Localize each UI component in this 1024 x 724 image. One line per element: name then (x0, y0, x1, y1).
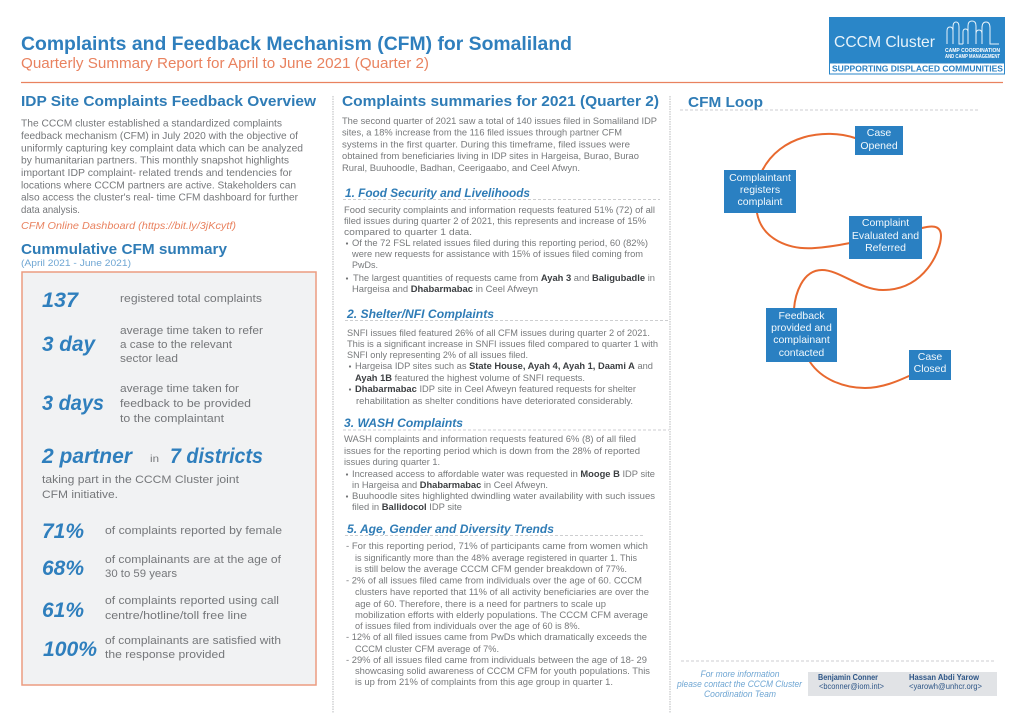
heading: cumulative summary: Cummulative CFM summary (21, 241, 228, 258)
stat: 3 days: to the complaintant (120, 413, 225, 425)
stat: 3 day: sector lead (120, 353, 178, 365)
text block: intro: Rural, Buuhoodle, Badhan, Ceerigaabo, and Ceel Afwyn. (342, 163, 580, 174)
logo: CCCM Cluster: CCCM Cluster (834, 34, 936, 51)
section: shelter: This is a significant increase in SNFI issues filed compared to quarter 1 with (347, 339, 658, 350)
section: shelter: Dhabarmabac IDP site in Ceel Afweyn featured requests for shelter (355, 384, 636, 395)
section: age, gender and diversity: - 29% of all issues filed came from individuals between the age of 18- 29 (346, 655, 647, 666)
stat: partners and districts: in (150, 453, 159, 465)
section: food security: Food security complaints and information requests featured 51% (72) of all (344, 205, 655, 216)
heading: age, gender and diversity: 5. Age, Gender and Diversity Trends (347, 522, 554, 536)
panel: CFM loop (680, 94, 980, 388)
panel: overview (21, 93, 316, 232)
section: age, gender and diversity (345, 522, 650, 688)
text block: overview: uniformly capturing key complaint data which can be analyzed (21, 142, 303, 154)
stat: 137: registered total complaints (120, 293, 262, 305)
panel: cumulative stats (22, 272, 316, 685)
stat: 100% (43, 635, 281, 661)
stat: partners and districts (41, 445, 263, 501)
contacts box: Benjamin Conner (818, 673, 878, 682)
section: age, gender and diversity: is still below the average CCCM CFM gender breakdown of 77%. (355, 564, 627, 575)
step: complainant registers complaint: complaint (738, 196, 783, 208)
stat: partners and districts: 7 districts (170, 445, 263, 468)
stat: 3 days: feedback to be provided (120, 398, 251, 410)
section: age, gender and diversity: is significantly more than the 48% average registered in quarter 1. This (355, 553, 637, 564)
section: age, gender and diversity: CCCM cluster CFM average of 7%. (355, 644, 499, 655)
stat: 100%: of complainants are satisfied with (105, 635, 281, 647)
section: food security: compared to quarter 1 data. (344, 227, 472, 238)
section: shelter: Hargeisa IDP sites such as State House, Ayah 4, Ayah 1, Daami A and (355, 361, 653, 372)
step: case closed: Closed (914, 363, 947, 375)
section: WASH: issues during quarter 1. (344, 457, 440, 468)
stat: 61%: of complaints reported using call (105, 595, 279, 607)
section: food security: filed issues during quarter 2 of 2021, this represents and increase of 15% (344, 216, 647, 227)
stat: 100%: the response provided (105, 649, 225, 661)
step: complaint evaluated and referred: Evaluated and (852, 230, 919, 242)
stat: partners and districts: taking part in the CCCM Cluster joint (42, 474, 240, 486)
step: case opened: Case (867, 127, 891, 139)
text block: overview: by humanitarian partners. This monthly snapshot highlights (21, 154, 289, 166)
text block: overview (21, 118, 303, 216)
logo: CCCM Cluster: SUPPORTING DISPLACED COMMUNITIES (832, 64, 1003, 74)
section: shelter (345, 307, 669, 407)
step: case opened (855, 126, 903, 155)
connectors: loop curves (757, 134, 941, 388)
section: food security (343, 186, 660, 295)
stat: partners and districts: CFM initiative. (42, 489, 118, 501)
section: shelter: SNFI only representing 2% of all issues filed. (347, 350, 528, 361)
section: WASH (343, 416, 669, 513)
heading: overview: IDP Site Complaints Feedback Overview (21, 93, 316, 110)
contacts box: <yarowh@unhcr.org> (909, 682, 982, 691)
text block: overview: locations where CCCM partners are active. Stakeholders can (21, 180, 296, 192)
section: food security: PwDs. (352, 260, 378, 271)
section: age, gender and diversity: - For this reporting period, 71% of participants came from women which (346, 541, 648, 552)
stat: 71%: 71% (42, 520, 84, 543)
section: food security: Hargeisa and Dhabarmabac in Ceel Afweyn (352, 284, 538, 295)
text block: overview: also access the cluster's real- time CFM dashboard for further (21, 192, 298, 204)
step: feedback provided: Feedback (778, 310, 825, 322)
section: shelter: SNFI issues filed featured 26% of all CFM issues during quarter 2 of 2021. (347, 328, 650, 339)
contact note: Coordination Team (704, 689, 776, 699)
contact note: please contact the CCCM Cluster (676, 679, 803, 689)
text block: overview: important IDP complaint- related trends and tendencies for (21, 167, 292, 179)
heading: food security: 1. Food Security and Livelihoods (345, 186, 530, 200)
section: WASH: filed in Ballidocol IDP site (352, 502, 462, 513)
stat: 61% (42, 595, 279, 622)
subtitle: Quarterly Summary Report for April to June 2021 (Quarter 2) (21, 55, 429, 72)
text block: intro: systems in the first quarter. During this timeframe, filed issues were (342, 140, 630, 150)
stat: 68%: 30 to 59 years (105, 568, 177, 580)
text block: intro: The second quarter of 2021 saw a total of 140 issues filed in Somaliland IDP (342, 116, 657, 127)
heading: CFM loop: CFM Loop (688, 94, 763, 111)
stat: 3 day: average time taken to refer (120, 325, 263, 337)
step: feedback provided: contacted (779, 347, 824, 359)
stat: 3 day: a case to the relevant (120, 339, 233, 351)
step: feedback provided (766, 308, 837, 362)
logo: CCCM Cluster (829, 17, 1005, 74)
step: case closed (909, 350, 951, 380)
text block: overview: The CCCM cluster established a standardized complaints (21, 118, 282, 130)
text block: intro: sites, a 18% increase from the 116 filed issues through partner CFM (342, 128, 622, 138)
text block: intro (342, 116, 657, 174)
section: WASH: Increased access to affordable water was requested in Mooge B IDP site (352, 469, 655, 480)
stat: 3 days (42, 383, 251, 425)
section: WASH: in Hargeisa and Dhabarmabac in Ceel Afweyn. (352, 480, 548, 491)
stat: 71%: of complaints reported by female (105, 525, 282, 537)
section: age, gender and diversity: showcasing solid awareness of CCCM CFM for youth populations. This (355, 666, 650, 677)
heading: shelter: 2. Shelter/NFI Complaints (346, 307, 494, 321)
step: complaint evaluated and referred (849, 216, 922, 259)
section: age, gender and diversity: - 12% of all filed issues came from PwDs which dramatically exceeds the (346, 632, 647, 643)
section: age, gender and diversity: is up from 21% of complaints from this age group in quarter 1. (355, 677, 613, 688)
contacts box: Hassan Abdi Yarow (909, 673, 980, 682)
logo: CCCM Cluster: CAMP COORDINATION (945, 48, 1000, 54)
stat: 71% (42, 520, 282, 543)
section: WASH: WASH complaints and information requests featured 6% (8) of all filed (344, 434, 636, 445)
contacts box: <bconner@iom.int> (819, 682, 884, 691)
text block: overview: feedback mechanism (CFM) in July 2020 with the objective of (21, 130, 298, 142)
contact note (676, 669, 803, 699)
stat: 68%: of complainants are at the age of (105, 554, 282, 566)
heading: complaints summaries: Complaints summaries for 2021 (Quarter 2) (342, 93, 659, 110)
step: complaint evaluated and referred: Complaint (862, 217, 909, 229)
section: food security: were new requests for assistance with 15% of issues filed coming from (351, 249, 643, 260)
step: complainant registers complaint (724, 170, 796, 213)
section: WASH: issues for the reporting period which is down from the 28% of reported (344, 446, 640, 457)
stat: 61%: 61% (42, 599, 84, 622)
logo: CCCM Cluster: AND CAMP MANAGEMENT (945, 54, 1000, 60)
panel: complaints summaries (342, 93, 669, 688)
stat: 68%: 68% (42, 557, 84, 580)
section: food security: Of the 72 FSL related issues filed during this reporting period, 60 (82%) (352, 238, 648, 249)
stat: 61%: centre/hotline/toll free line (105, 610, 247, 622)
stat: 100%: 100% (43, 638, 97, 661)
step: complainant registers complaint: registers (740, 184, 780, 196)
step: feedback provided: complainant (773, 334, 830, 346)
section: WASH: Buuhoodle sites highlighted dwindling water availability with such issues (352, 491, 655, 502)
section: age, gender and diversity: mobilization efforts with elderly populations. The CCCM CFM average (355, 610, 648, 621)
step: complaint evaluated and referred: Referred (865, 242, 906, 254)
stat: 137 (42, 289, 262, 312)
contacts box (808, 672, 997, 696)
stat: 137: 137 (42, 289, 79, 312)
stat: 3 days: 3 days (42, 392, 104, 415)
stat: partners and districts: 2 partner (41, 445, 134, 468)
section: food security: The largest quantities of requests came from Ayah 3 and Baligubadle in (353, 273, 655, 284)
contact note: For more information (700, 669, 780, 679)
step: complainant registers complaint: Complaintant (729, 172, 791, 184)
section: age, gender and diversity: of issues filed from individuals over the age of 60 is 8%. (355, 621, 580, 632)
heading: WASH: 3. WASH Complaints (344, 416, 463, 430)
step: case opened: Opened (860, 140, 898, 152)
step: case closed: Case (918, 351, 942, 363)
section: shelter: rehabilitation as shelter conditions have deteriorated considerably. (356, 396, 633, 407)
stat: 3 days: average time taken for (120, 383, 239, 395)
stat: 3 day (42, 325, 263, 365)
title: Complaints and Feedback Mechanism (CFM) for Somaliland (21, 34, 572, 55)
text block: overview: data analysis. (21, 204, 80, 216)
link: online dashboard: CFM Online Dashboard (https://bit.ly/3jKcytf) (21, 220, 236, 232)
section: age, gender and diversity: clusters have reported that 11% of all activity beneficiaries are over the (355, 587, 649, 598)
text block: intro: obtained from beneficiaries living in IDP sites in Hargeisa, Burao, Burao (342, 151, 639, 162)
section: shelter: Ayah 1B featured the highest volume of SNFI requests. (355, 373, 585, 384)
step: feedback provided: provided and (771, 322, 832, 334)
stat: 3 day: 3 day (42, 333, 96, 356)
section: age, gender and diversity: age of 60. Therefore, there is a need for partners to scale up (355, 599, 606, 610)
stat: 68% (42, 554, 282, 580)
date range: (April 2021 - June 2021) (21, 258, 131, 268)
section: age, gender and diversity: - 2% of all issues filed came from individuals over the age of 60. CCCM (346, 576, 642, 586)
